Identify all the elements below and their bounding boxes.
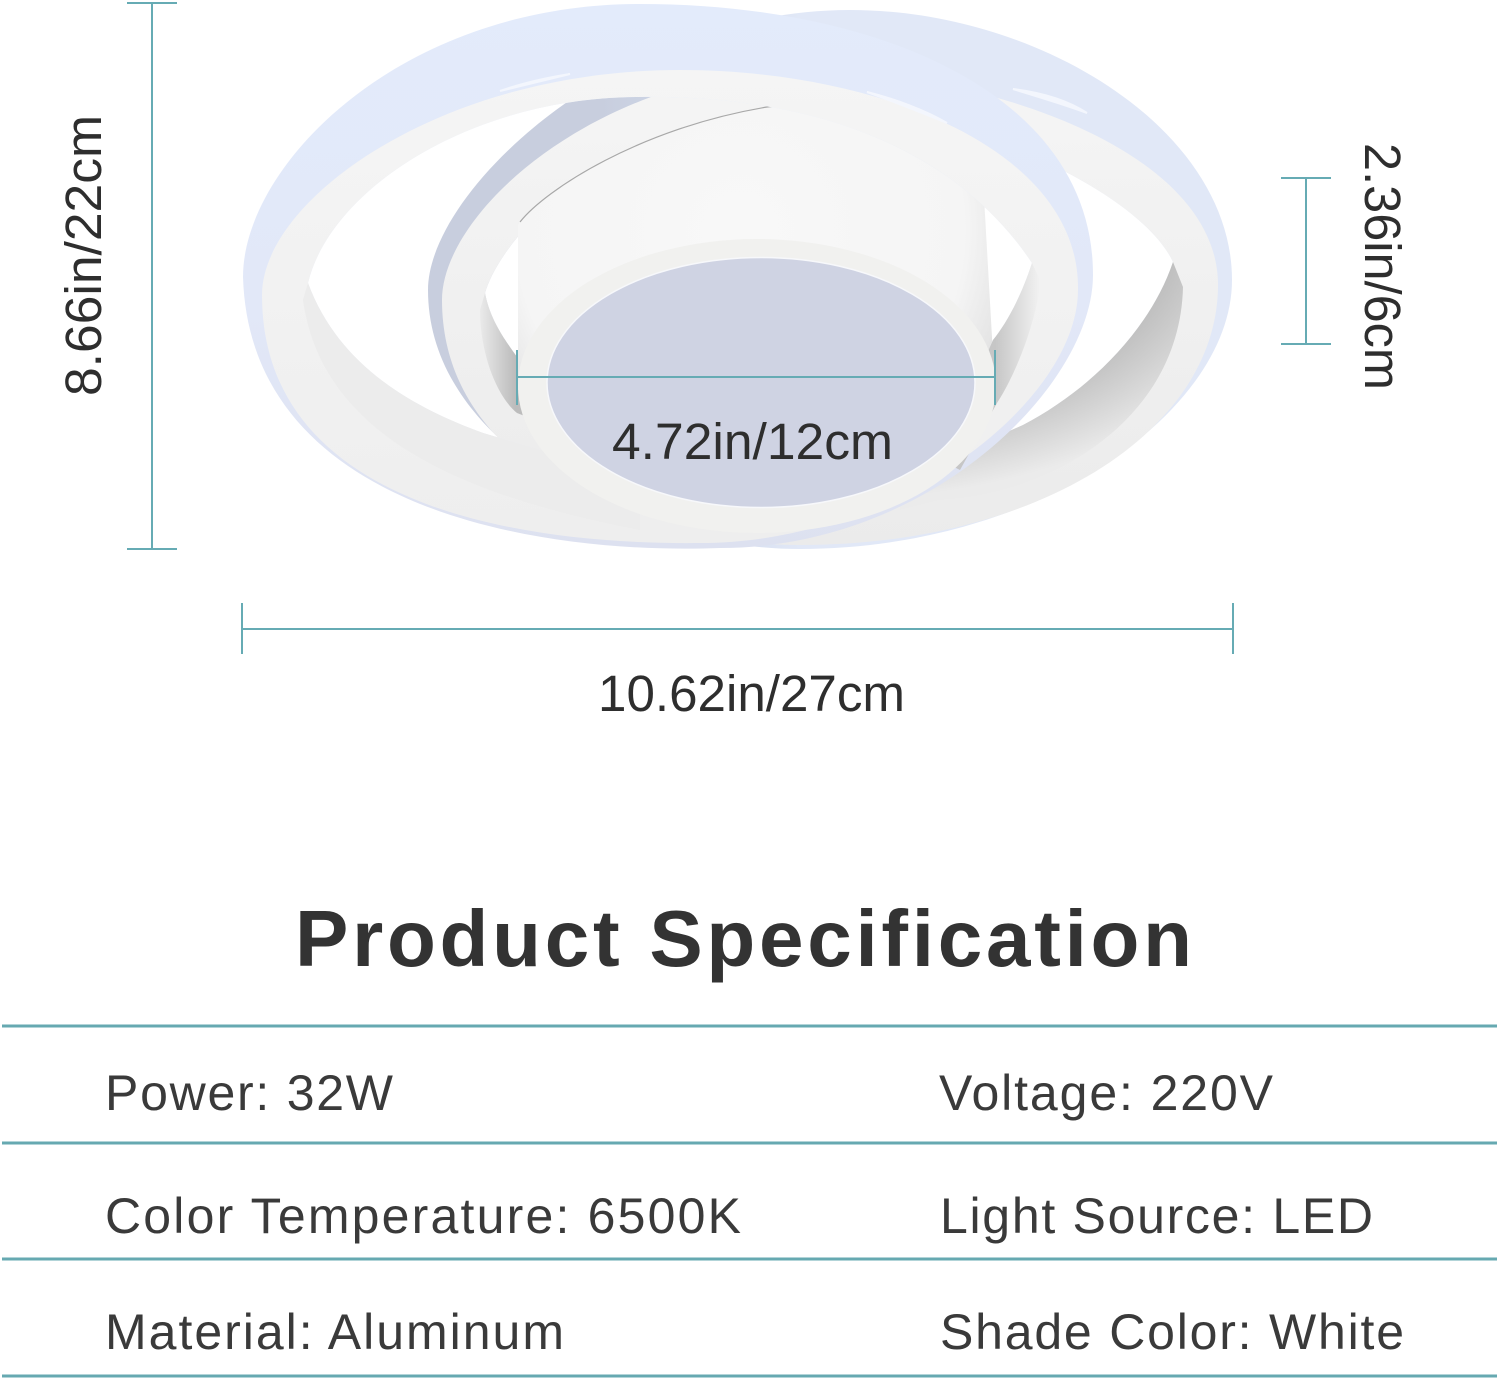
dimension: width 10.62in/27cm — [242, 603, 1233, 722]
dimension: width 10.62in/27cm: 10.62in/27cm — [598, 665, 905, 722]
back ring — [428, 10, 1232, 549]
dimension: depth 2.36in/6cm: 2.36in/6cm — [1354, 143, 1411, 390]
spec: light source: Light Source: LED — [940, 1188, 1373, 1244]
spec: color temperature: Color Temperature: 6500K — [105, 1188, 741, 1244]
spec: voltage: Voltage: 220V — [939, 1065, 1274, 1121]
dimension: height 8.66in/22cm: 8.66in/22cm — [55, 115, 112, 396]
spec: power: Power: 32W — [105, 1065, 394, 1121]
dimension: base 4.72in/12cm: 4.72in/12cm — [612, 413, 893, 470]
cap plate — [547, 258, 975, 508]
dimension: depth 2.36in/6cm — [1281, 143, 1411, 390]
dimension: base 4.72in/12cm — [517, 350, 995, 470]
front ring — [243, 4, 1093, 549]
title: Product Specification — [295, 894, 1192, 983]
highlights on front ring — [867, 92, 947, 123]
dimension: height 8.66in/22cm — [55, 3, 177, 549]
spec: shade color: Shade Color: White — [940, 1304, 1404, 1360]
highlight on back ring — [1013, 89, 1087, 113]
central cylinder — [518, 90, 1010, 390]
lamp illustration — [243, 4, 1232, 549]
cylinder end cap — [518, 239, 996, 533]
spec: material: Material: Aluminum — [105, 1304, 564, 1360]
specification table — [2, 1026, 1497, 1376]
